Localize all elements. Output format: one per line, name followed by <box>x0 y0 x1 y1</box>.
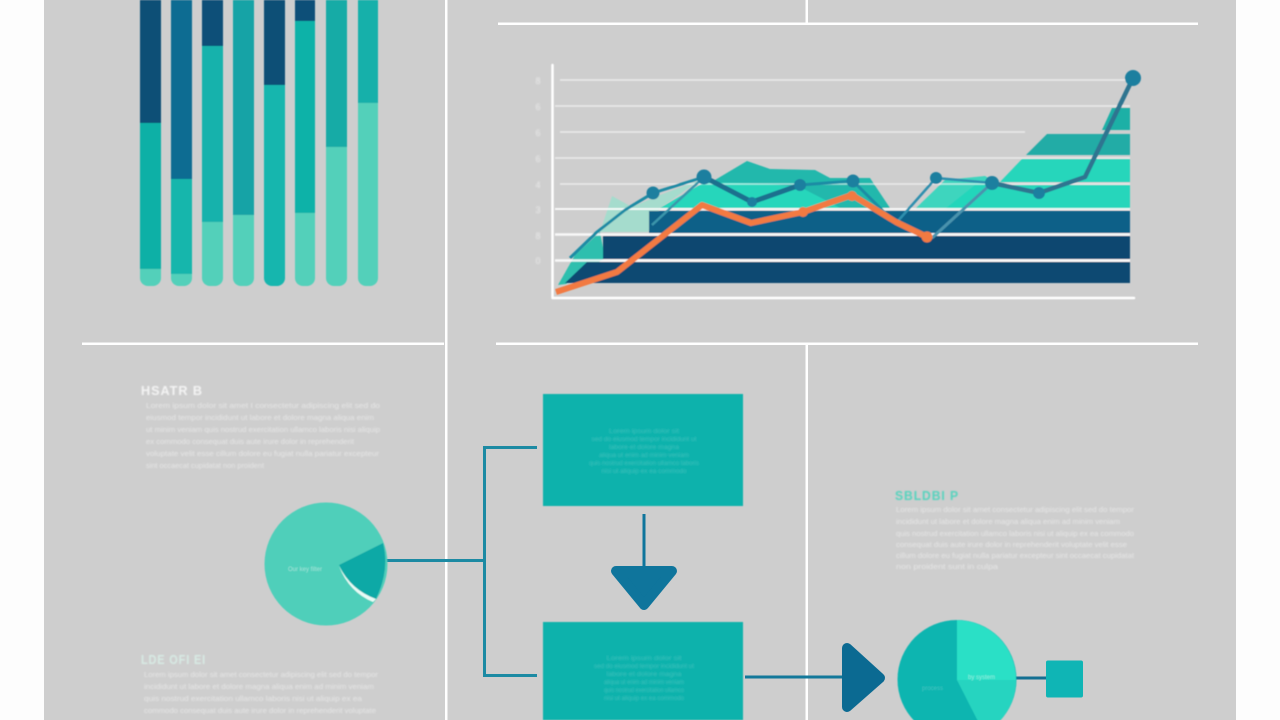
body: quis nostrud exercitation ullamco laboris nisi ut aliquip ex ea <box>144 694 363 703</box>
body: commodo consequat duis aute irure dolor in reprehenderit voluptate <box>144 706 376 715</box>
bar 8 <box>358 0 378 286</box>
flow box top: Lorem ipsum dolor sit <box>609 429 679 435</box>
body: eiusmod tempor incididunt ut labore et dolore magna aliqua enim <box>146 413 374 422</box>
bar 3 <box>202 0 223 286</box>
body <box>896 505 1135 571</box>
body: consequat duis aute irure dolor in reprehenderit voluptate velit esse <box>896 540 1127 549</box>
y axis labels: 3 <box>535 205 541 215</box>
axes <box>552 65 1134 298</box>
flow box top: quis nostrud exercitation ullamco laboris <box>589 461 699 467</box>
y axis labels <box>535 76 541 266</box>
y axis labels: 6 <box>535 128 541 138</box>
grid lines <box>555 80 1130 184</box>
pie chart right <box>898 620 1016 720</box>
body: Lorem ipsum dolor sit amet consectetur adipiscing elit sed do tempor <box>896 505 1135 514</box>
navy bands <box>565 211 1130 283</box>
bar 1 <box>140 0 161 286</box>
body: incididunt ut labore et dolore magna aliqua enim ad minim veniam <box>144 682 374 691</box>
y axis labels: 8 <box>535 231 541 241</box>
flow box bottom: sed do eiusmod tempor incididunt ut <box>594 664 694 670</box>
body: non proident sunt in culpa <box>896 562 999 571</box>
arrow down <box>616 571 672 605</box>
flow box bottom: labore et dolore magna <box>606 672 682 678</box>
flow box bottom: quis nostrud exercitation ullamco <box>604 688 685 694</box>
bar 5 <box>264 0 285 286</box>
orange series line <box>556 191 932 292</box>
teal series line <box>570 78 1133 258</box>
body: voluptate velit esse cillum dolore eu fugiat nulla pariatur excepteur <box>146 449 380 458</box>
bar 7 <box>326 0 347 286</box>
body <box>146 401 380 470</box>
body: Lorem ipsum dolor sit amet I consectetur adipiscing elit sed do <box>146 401 380 410</box>
pie chart left: Our key filter <box>288 567 322 573</box>
pie chart right: process <box>922 686 943 692</box>
heading: HSATR B <box>141 383 203 398</box>
body: incididunt ut labore et dolore magna aliqua enim ad minim veniam <box>896 517 1120 526</box>
flow box top: labore et dolore magna <box>609 445 680 451</box>
flow box top: nisi ut aliquip ex ea commodo <box>602 469 687 475</box>
body: ex commodo consequat duis aute irure dolor in reprehenderit <box>146 437 355 446</box>
square node <box>1046 660 1083 698</box>
bar 4 <box>233 0 254 286</box>
arrow right <box>847 648 880 707</box>
y axis labels: 4 <box>535 180 541 190</box>
body: cillum dolore eu fugiat nulla pariatur excepteur sint occaecat cupidatat <box>896 551 1135 560</box>
body: Lorem ipsum dolor sit amet consectetur adipiscing elit sed do tempor <box>144 670 379 679</box>
bar 2 <box>171 0 192 286</box>
series markers <box>646 70 1141 207</box>
heading: LDE OFI EI <box>141 652 206 667</box>
text block upper left <box>141 383 380 470</box>
flow box bottom <box>543 622 743 720</box>
y axis labels: 0 <box>535 256 541 266</box>
connectors <box>386 448 1048 678</box>
flow box top: aliqua ut enim ad minim veniam <box>599 453 689 459</box>
heading: SBLDBI P <box>895 488 959 503</box>
flow box bottom: Lorem ipsum dolor sit <box>606 656 682 662</box>
stacked bar chart <box>140 0 378 286</box>
y axis labels: 6 <box>535 154 541 164</box>
flow box top <box>543 394 743 506</box>
y axis labels: 8 <box>535 76 541 86</box>
y axis labels: 6 <box>535 102 541 112</box>
body: sint occaecat cupidatat non proident <box>146 461 265 470</box>
pie chart right: by system <box>968 675 995 681</box>
bar 6 <box>295 0 315 286</box>
flow box top: sed do eiusmod tempor incididunt ut <box>592 437 697 443</box>
body: ut minim veniam quis nostrud exercitation ullamco laboris nisi aliquip <box>146 425 380 434</box>
line and area chart <box>535 65 1141 298</box>
text block lower left <box>141 652 379 715</box>
area bands <box>558 108 1130 285</box>
flow box bottom: nisi ut aliquip ex ea commodo <box>604 696 685 702</box>
flow box bottom: aliqua ut enim ad minim veniam <box>604 680 684 686</box>
pie chart left <box>264 502 388 626</box>
body <box>144 670 379 715</box>
body: quis nostrud exercitation ullamco laboris nisi ut aliquip ex ea commodo <box>896 529 1134 538</box>
text block right <box>895 488 1135 571</box>
